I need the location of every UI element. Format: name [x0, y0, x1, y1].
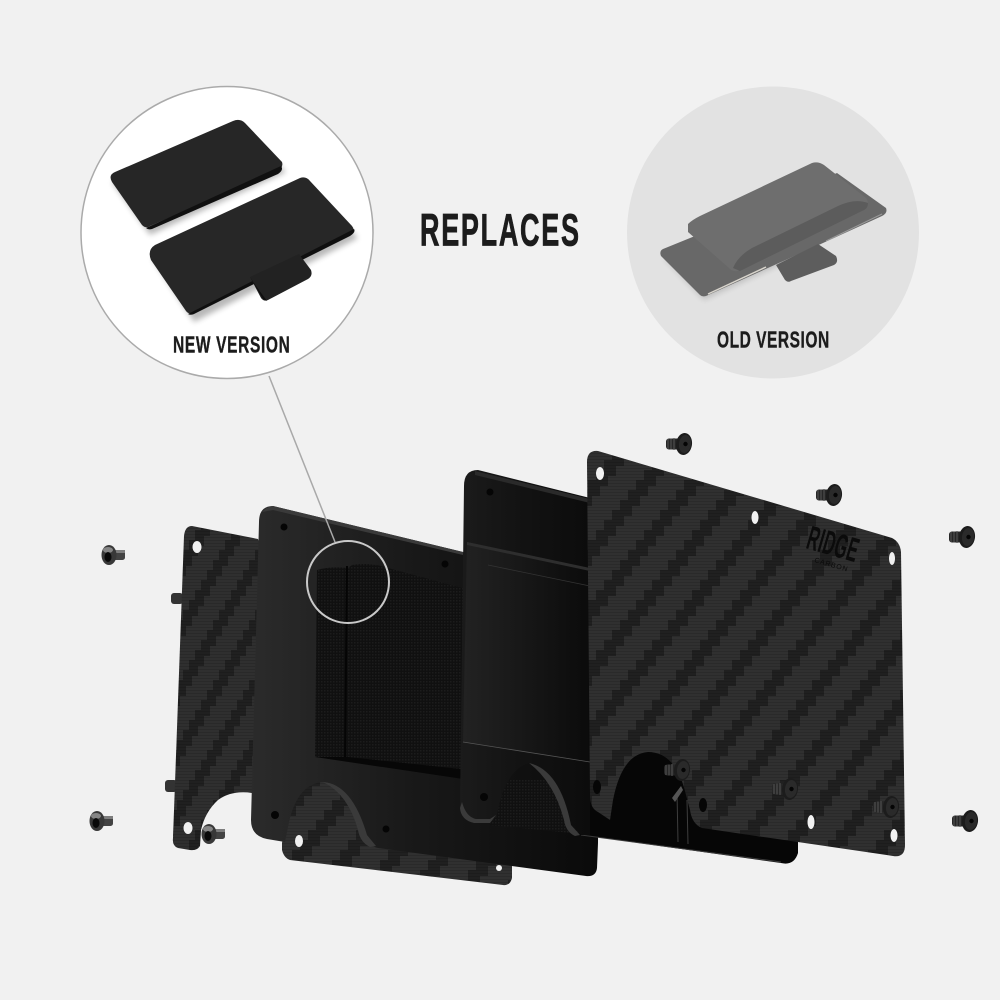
panel: new version: [81, 86, 373, 378]
logo: ridge carbon: CARBON: [813, 557, 848, 573]
screw: on plate right: [873, 795, 900, 819]
label: old version: OLD VERSION: [717, 327, 829, 353]
pull tab: [250, 254, 312, 301]
bottom carbon plate: [282, 772, 512, 885]
lower plate: [660, 173, 886, 296]
screw: rear lower inner: [202, 824, 225, 844]
detail ring on elastic: [307, 541, 389, 623]
screw: far right lower: [952, 809, 979, 833]
front carbon plate: [587, 451, 905, 856]
elastic band in wallet: [315, 564, 470, 780]
arch rim: [529, 763, 580, 836]
heading: replaces: REPLACES: [420, 204, 579, 255]
vertical pin lines in front arch: [677, 792, 688, 844]
plate screw holes: [280, 524, 288, 530]
screw: in arch: [664, 758, 691, 782]
screw: front top: [666, 432, 693, 456]
connector line from new version circle to elastic detail: [269, 376, 335, 542]
pull tab: [776, 244, 837, 282]
screw: front upper right: [816, 483, 843, 507]
screw: rear upper left: [102, 545, 125, 565]
screw: far right upper: [949, 525, 976, 549]
arch rim: [323, 782, 376, 847]
icon: new elastic band, short: [111, 120, 286, 235]
icon: new elastic band, long with pull tab: [150, 177, 358, 322]
screw: rear lower left: [90, 811, 113, 831]
top edge highlight: [262, 506, 463, 555]
left rear carbon plate: [165, 526, 275, 850]
middle black plate with sleeve: [460, 470, 590, 836]
exploded wallet view: [90, 376, 979, 885]
new version circle: [81, 86, 373, 378]
screw: on plate centre: [772, 777, 799, 801]
rear black plate behind front plate: [575, 700, 798, 864]
label: new version: NEW VERSION: [173, 332, 290, 358]
elastic seen through middle plate arch: [490, 780, 582, 834]
logo: ridge carbon: RIDGE: [803, 518, 863, 570]
panel: old version: [627, 86, 919, 378]
old version circle: [627, 86, 919, 378]
icon: old elastic and metal plate: [660, 162, 886, 300]
main black plate: [251, 506, 600, 876]
dark countersunk holes: [593, 780, 601, 794]
upper loop: [688, 162, 868, 271]
sleeve: [463, 542, 590, 762]
